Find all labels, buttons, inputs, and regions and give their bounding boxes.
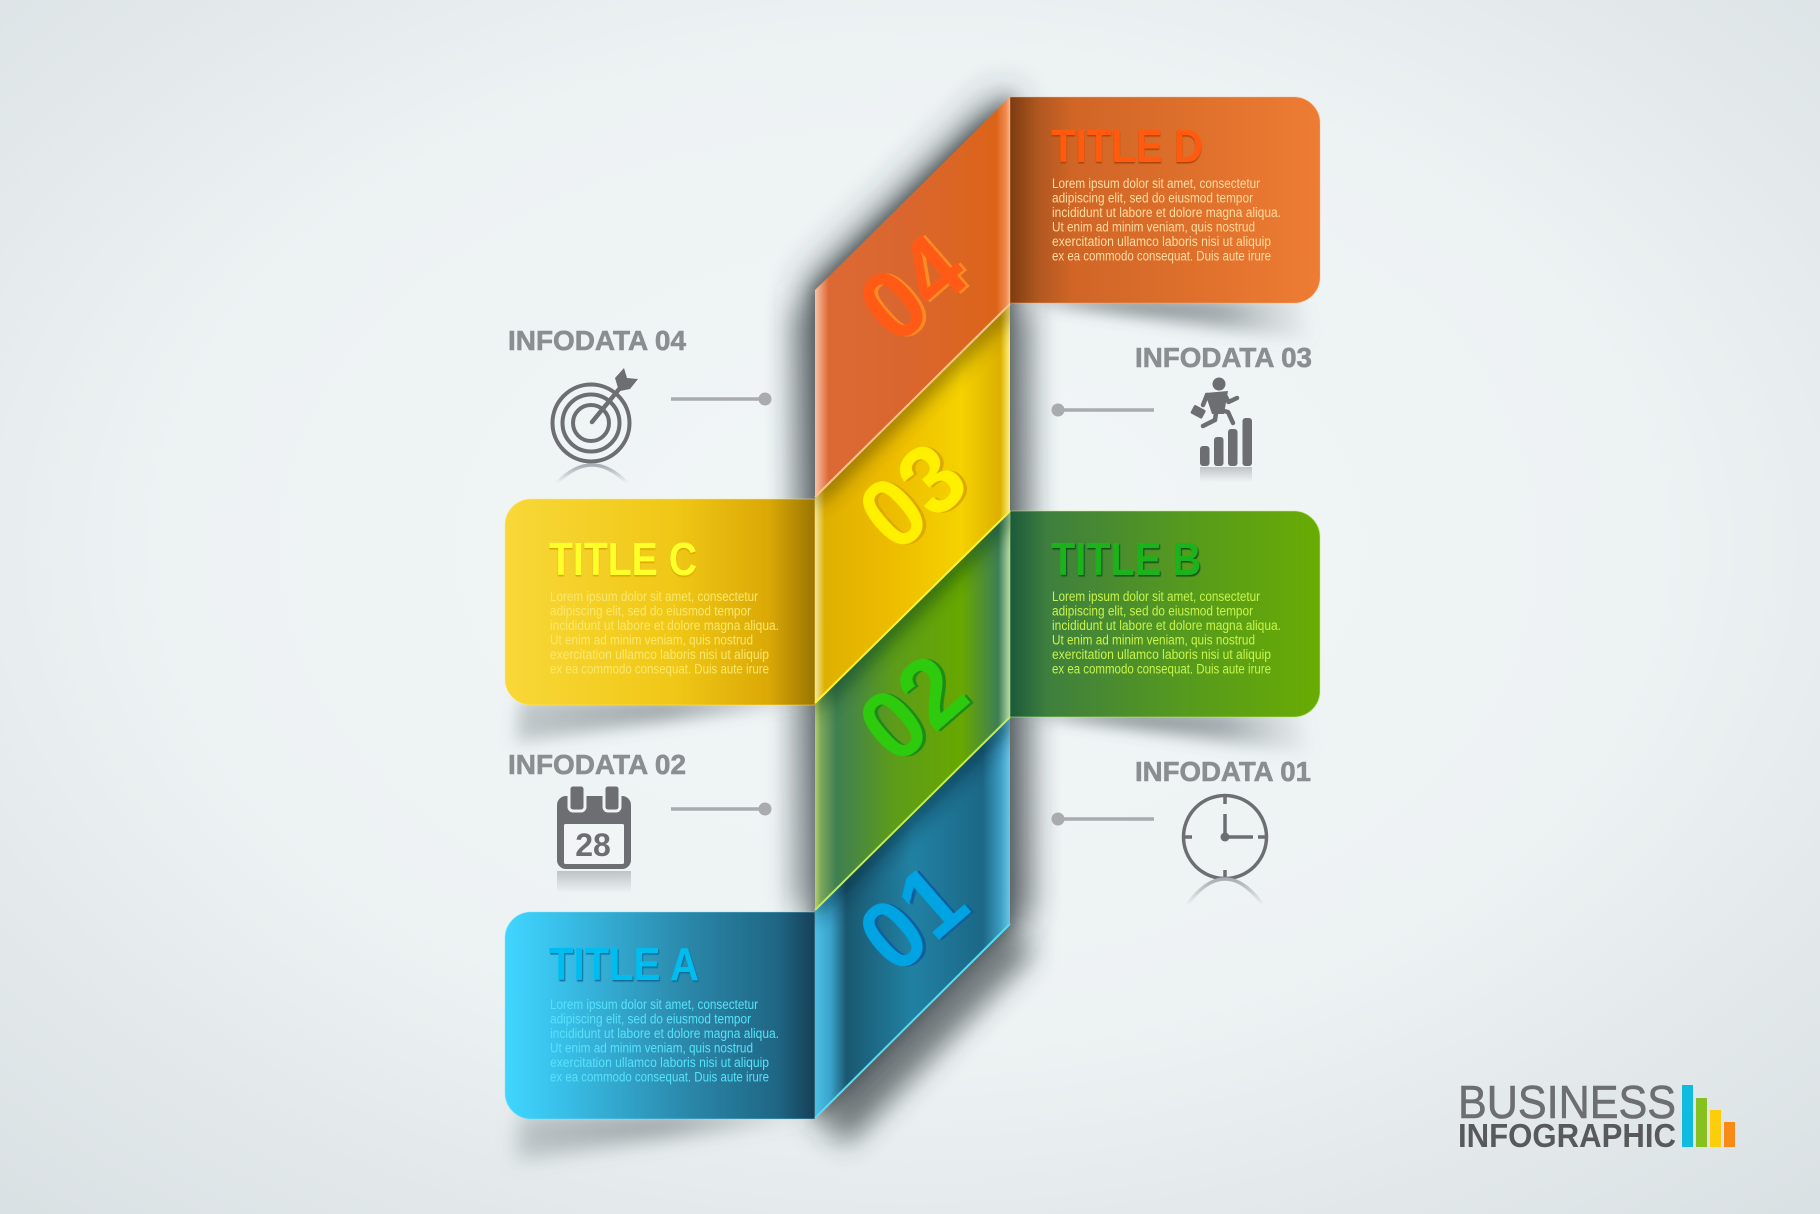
ribbon segment 03 bbox=[815, 296, 1010, 703]
ribbon segment 02 bbox=[815, 503, 1010, 910]
number 03: 03 bbox=[838, 421, 987, 571]
text block: title A: incididunt ut labore et dolore magna aliqua. bbox=[550, 1026, 779, 1041]
icon: clock bbox=[1184, 796, 1266, 905]
icon: target bbox=[552, 368, 638, 483]
connector bbox=[671, 802, 772, 816]
icon: calendar bbox=[557, 785, 631, 893]
text block: title C: Ut enim ad minim veniam, quis nostrud bbox=[550, 632, 753, 648]
ribbon segment 01 bbox=[815, 709, 1010, 1118]
shadow: title B bbox=[1020, 711, 1310, 753]
logo bars bbox=[1682, 1085, 1735, 1147]
text block: title B: ex ea commodo consequat. Duis aute irure bbox=[1052, 662, 1271, 676]
infodata 03 bbox=[1052, 342, 1312, 482]
infodata 04 bbox=[508, 325, 772, 483]
shadow: title C bbox=[516, 699, 812, 742]
text block: title B bbox=[1052, 589, 1281, 676]
shadow: title D bbox=[1020, 298, 1310, 340]
connector bbox=[1052, 812, 1154, 826]
text block: title A: Lorem ipsum dolor sit amet, consectetur bbox=[550, 997, 758, 1012]
text block: title A: adipiscing elit, sed do eiusmod tempor bbox=[550, 1012, 751, 1026]
number 04: 04 bbox=[838, 213, 987, 363]
text block: title D: exercitation ullamco laboris nisi ut aliquip bbox=[1052, 234, 1271, 249]
text block: title A bbox=[550, 997, 779, 1084]
text block: title C: exercitation ullamco laboris nisi ut aliquip bbox=[550, 647, 769, 662]
text block: title C: Lorem ipsum dolor sit amet, consectetur bbox=[550, 589, 758, 604]
infodata 01 bbox=[1052, 756, 1311, 905]
ribbon segment 04 bbox=[815, 97, 1010, 497]
text block: title D: ex ea commodo consequat. Duis aute irure bbox=[1052, 248, 1271, 264]
panel: title D card bbox=[1010, 97, 1320, 303]
panel: title B card bbox=[1010, 511, 1320, 717]
heading: title A: TITLE A bbox=[549, 938, 699, 990]
label: INFODATA 03 bbox=[1135, 342, 1312, 373]
text block: title D bbox=[1052, 176, 1281, 264]
infodata 02 bbox=[508, 749, 772, 893]
text block: title A: Ut enim ad minim veniam, quis nostrud bbox=[550, 1040, 753, 1056]
text block: title D: incididunt ut labore et dolore magna aliqua. bbox=[1052, 205, 1281, 220]
text block: title C: incididunt ut labore et dolore magna aliqua. bbox=[550, 618, 779, 633]
label: INFODATA 04 bbox=[508, 325, 686, 356]
icon: runner on bars bbox=[1190, 378, 1252, 482]
text block: title D: Lorem ipsum dolor sit amet, consectetur bbox=[1052, 176, 1260, 191]
panel: title A card bbox=[505, 912, 815, 1119]
number 02: 02 bbox=[838, 633, 987, 783]
logo text: INFOGRAPHIC bbox=[1458, 1117, 1676, 1154]
text block: title A: ex ea commodo consequat. Duis aute irure bbox=[550, 1070, 769, 1084]
logo text: BUSINESS bbox=[1458, 1076, 1676, 1128]
column drop shadows bbox=[795, 90, 1034, 1146]
card shadows bbox=[516, 298, 1310, 1160]
text block: title C: adipiscing elit, sed do eiusmod tempor bbox=[550, 604, 751, 618]
text block: title D: adipiscing elit, sed do eiusmod tempor bbox=[1052, 190, 1253, 206]
heading: title C: TITLE C bbox=[549, 533, 697, 585]
panel: title C card bbox=[505, 499, 815, 705]
text block: title B: incididunt ut labore et dolore magna aliqua. bbox=[1052, 618, 1281, 633]
label: INFODATA 02 bbox=[508, 749, 686, 780]
icon: calendar: 28 bbox=[575, 827, 611, 863]
text block: title B: adipiscing elit, sed do eiusmod tempor bbox=[1052, 604, 1253, 618]
text block: title D: Ut enim ad minim veniam, quis nostrud bbox=[1052, 220, 1255, 234]
text block: title B: exercitation ullamco laboris nisi ut aliquip bbox=[1052, 647, 1271, 662]
shadow: title A bbox=[516, 1113, 812, 1160]
text block: title A: exercitation ullamco laboris nisi ut aliquip bbox=[550, 1055, 769, 1070]
heading: title D: TITLE D bbox=[1051, 120, 1203, 172]
number 01: 01 bbox=[838, 843, 987, 993]
text block: title B: Ut enim ad minim veniam, quis nostrud bbox=[1052, 632, 1255, 648]
label: INFODATA 01 bbox=[1135, 756, 1311, 787]
logo text bbox=[1458, 1076, 1676, 1154]
logo: business infographic bbox=[1458, 1076, 1735, 1154]
text block: title B: Lorem ipsum dolor sit amet, consectetur bbox=[1052, 589, 1260, 604]
connector bbox=[671, 392, 772, 406]
text block: title C bbox=[550, 589, 779, 676]
connector bbox=[1052, 404, 1154, 416]
text block: title C: ex ea commodo consequat. Duis aute irure bbox=[550, 662, 769, 676]
heading: title B: TITLE B bbox=[1051, 533, 1201, 585]
